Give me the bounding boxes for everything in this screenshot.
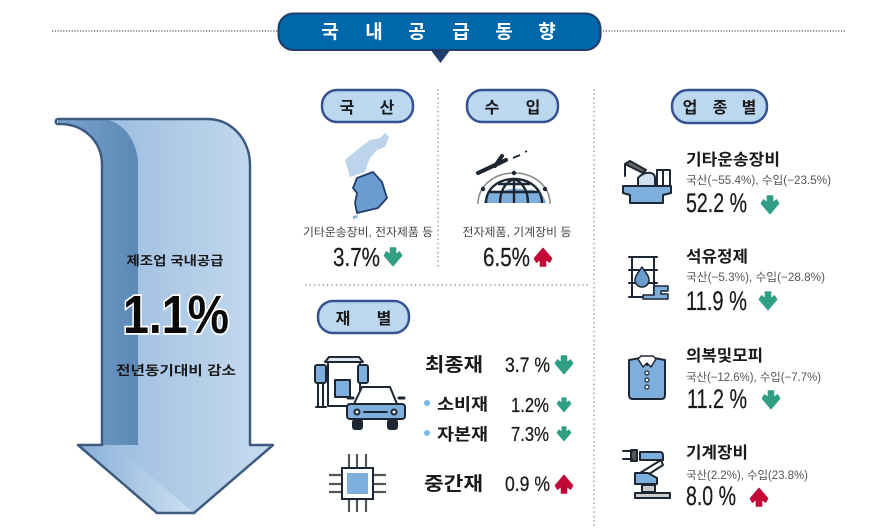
pill heading: by industry: 업 bbox=[683, 99, 697, 117]
value: 52.2: 52.2 % bbox=[686, 188, 747, 218]
icon: oil barrel bbox=[629, 257, 668, 299]
pill heading: by goods bbox=[318, 301, 409, 333]
arrow: up bbox=[750, 488, 768, 506]
panel: imports bbox=[462, 90, 572, 272]
pill heading: imports: 입 bbox=[526, 99, 540, 117]
value: 3.7%: 3.7% bbox=[333, 242, 380, 272]
title banner: 내 bbox=[365, 21, 383, 43]
icon: ship bbox=[623, 161, 671, 203]
value: 8.0: 8.0 % bbox=[686, 481, 736, 511]
value: 6.5%: 6.5% bbox=[483, 242, 530, 272]
detail: domestic and import: 국산(−55.4%), 수입(−23.5%) bbox=[686, 174, 831, 187]
label: machinery equipment: 기계장비 bbox=[686, 444, 748, 462]
icon: plane and globe bbox=[478, 151, 550, 204]
title banner: 동 bbox=[495, 22, 513, 43]
arrow: down bbox=[760, 292, 776, 310]
panel: domestic production bbox=[303, 90, 433, 272]
label: petroleum refining: 석유정제 bbox=[686, 248, 748, 266]
label: final goods: 최종재 bbox=[425, 354, 483, 376]
pill heading: domestic: 국 bbox=[340, 100, 355, 117]
arrow: down bbox=[762, 196, 778, 214]
pill heading: by goods: 별 bbox=[377, 310, 391, 328]
label: other transport equipment: 기타운송장비 bbox=[686, 151, 780, 169]
label: consumer goods: 소비재 bbox=[437, 395, 488, 414]
label: intermediate goods: 중간재 bbox=[424, 473, 483, 495]
text: import products: 전자제품, 기계장비 등 bbox=[462, 226, 572, 239]
arrow caption top: 제조업 국내공급 bbox=[126, 253, 224, 268]
pill heading: by industry bbox=[672, 90, 767, 123]
value: 11.9: 11.9 % bbox=[686, 286, 747, 316]
title banner: 국 bbox=[321, 22, 339, 43]
icon: robot arm bbox=[623, 450, 670, 498]
arrow: down small bbox=[557, 427, 571, 441]
detail: domestic and import: 국산(−5.3%), 수입(−28.8%) bbox=[686, 271, 825, 284]
pill heading: by goods: 재 bbox=[336, 310, 350, 328]
value: 0.9: 0.9 % bbox=[505, 473, 550, 496]
value: 11.2: 11.2 % bbox=[687, 384, 747, 414]
title banner: 공 bbox=[408, 22, 426, 43]
pill heading: imports: 수 bbox=[485, 99, 500, 117]
label: clothing and fur: 의복및모피 bbox=[686, 347, 763, 365]
detail: domestic and import: 국산(−12.6%), 수입(−7.7%) bbox=[686, 371, 821, 384]
text: domestic products: 기타운송장비, 전자제품 등 bbox=[303, 226, 433, 239]
panel: by industry bbox=[623, 90, 831, 511]
pill heading: domestic: 산 bbox=[380, 99, 395, 117]
value: 7.3: 7.3% bbox=[511, 424, 549, 446]
pill heading: by industry: 별 bbox=[742, 99, 756, 117]
icon: semiconductor chip bbox=[329, 454, 386, 512]
arrow caption bottom: 전년동기대비 감소 bbox=[116, 363, 236, 378]
arrow: down small bbox=[557, 398, 571, 412]
title banner: 향 bbox=[538, 21, 556, 43]
icon: factory and car bbox=[315, 357, 405, 429]
arrow: down bbox=[762, 391, 780, 408]
value: 1.2: 1.2% bbox=[511, 395, 549, 417]
big down arrow: 1.1% decrease bbox=[56, 119, 273, 513]
label: capital goods: 자본재 bbox=[437, 425, 488, 444]
value: 3.7: 3.7 % bbox=[505, 354, 550, 377]
detail: domestic and import: 국산(2.2%), 수입(23.8%) bbox=[686, 469, 808, 482]
icon: Korean peninsula map bbox=[345, 133, 389, 219]
arrow: down bbox=[556, 356, 572, 374]
bullet: consumer goods bbox=[424, 400, 430, 406]
arrow: up bbox=[556, 476, 572, 493]
title banner bbox=[278, 14, 600, 63]
title banner: 급 bbox=[452, 22, 470, 43]
panel: by goods type bbox=[315, 301, 572, 512]
pill heading: by industry: 종 bbox=[713, 100, 728, 117]
pill heading: imports bbox=[467, 90, 558, 122]
arrow: down bbox=[384, 248, 402, 266]
bullet: capital goods bbox=[424, 430, 430, 436]
arrow big value: 1.1% bbox=[123, 285, 229, 345]
arrow: up bbox=[534, 248, 552, 266]
icon: shirt bbox=[629, 356, 665, 399]
pill heading: domestic bbox=[322, 90, 413, 122]
